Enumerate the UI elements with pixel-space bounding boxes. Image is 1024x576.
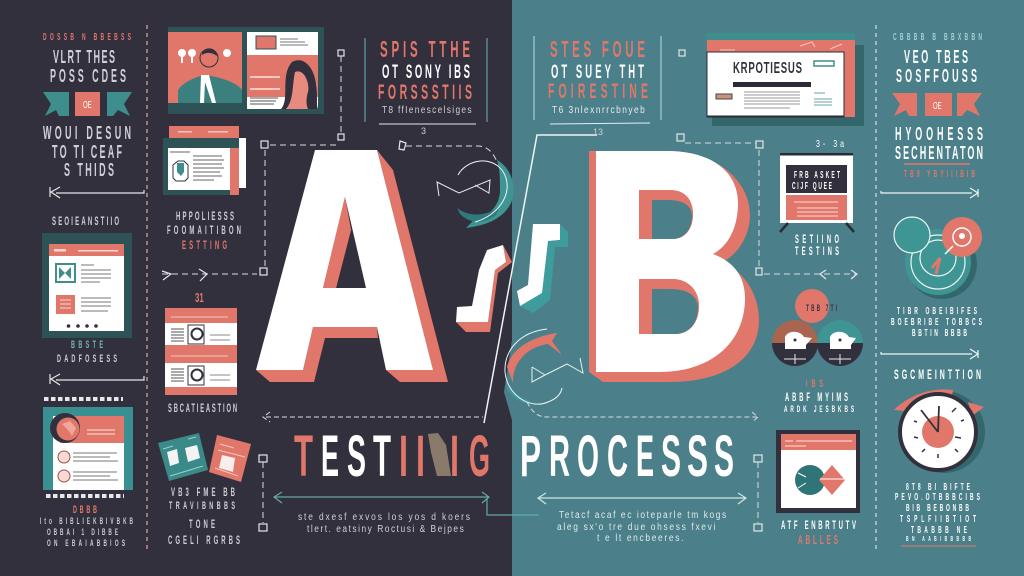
left column subheading: S THIDS	[64, 161, 114, 181]
dashed divider right	[875, 25, 877, 553]
ribbon badge left: OE	[83, 100, 92, 110]
text: baste process: DADFOSESS	[57, 352, 117, 365]
background: left dark half	[0, 0, 512, 576]
arrow right 2	[881, 349, 978, 359]
text: ab myths: ARDK JESBKBS	[784, 403, 854, 415]
heading block A	[365, 37, 487, 136]
panel: browser window	[163, 126, 246, 195]
icon group: two face circles: TBB 7TI	[806, 302, 837, 314]
title: testing: E	[321, 424, 339, 489]
panel: users illustration	[168, 27, 324, 114]
big letter B	[589, 151, 759, 382]
text block bottom right: PEVO.OTBBBCIBS	[895, 491, 980, 503]
label: segmentation right: SGCMEINTTION	[894, 368, 981, 383]
text: hypothesis formation	[167, 210, 241, 253]
ribbon badge right	[892, 93, 982, 116]
text block bottom left	[40, 503, 133, 549]
heading block A: OT SONY IBS	[382, 62, 470, 83]
dashed connector bracket upper left	[162, 50, 344, 281]
swirl icon bottom	[505, 329, 583, 404]
title: testing	[294, 424, 490, 489]
divider slash line	[484, 135, 597, 423]
title: process: E	[636, 424, 654, 489]
arrow: dashed span right	[527, 402, 758, 422]
text block bottom left: DBBB	[73, 503, 97, 516]
left column subheading: WOUI DESUN	[43, 124, 131, 144]
caption right: t e lt encbeeres.	[597, 532, 683, 544]
title: process: R	[549, 424, 570, 489]
right column subheading: SECHENTATON	[895, 144, 983, 164]
text: hypothesis formation: ESTTING	[182, 239, 227, 253]
heading block B: 13	[593, 127, 603, 137]
text block bottom right: BN AABIBBBBB	[906, 536, 971, 544]
big letter A	[256, 150, 448, 382]
text block bottom right: BIB BEBONBB	[906, 502, 969, 514]
panel: landing page card	[42, 233, 132, 338]
arrow right 1	[881, 188, 978, 198]
text block bottom right: TSPLFIIBTIOT	[900, 513, 976, 525]
text: chart caption: ABLLES	[798, 534, 838, 548]
text: cards caption: TONE	[189, 518, 215, 532]
panel: circle page card	[43, 399, 133, 496]
text: ab myths	[784, 377, 854, 415]
heading block A: FORSSSTIIS	[378, 80, 472, 104]
heading block B	[534, 36, 661, 137]
dashed connector bracket lower right	[754, 455, 762, 531]
arrow: teal span right	[538, 493, 746, 504]
text: cards caption	[168, 486, 240, 548]
text: hypothesis formation: HPPOLIESSS	[176, 210, 234, 224]
text: baste process: BBSTE	[71, 338, 103, 351]
right column heading	[893, 31, 982, 87]
title: testing: I	[450, 424, 459, 489]
arrow left 2	[50, 374, 144, 385]
caption right	[557, 509, 726, 544]
panel: tv testing screen: 3- 3a	[816, 138, 844, 149]
text: setting testing: TESTINS	[795, 245, 839, 258]
right column heading: CBBBB B BBXBBN	[893, 31, 982, 43]
ribbon badge right: OE	[933, 101, 942, 111]
right column subheading: HYOOHESSS	[895, 125, 983, 145]
title: process: S	[661, 424, 681, 489]
dashed connector bracket right	[677, 50, 857, 279]
text: cards caption: CGELI RGRBS	[168, 534, 240, 548]
dashed connector bracket lower left	[259, 455, 267, 531]
coral glyph: 31	[195, 291, 204, 306]
text: cards caption: TRAVIBNBBS	[169, 499, 235, 512]
slash squiggle right half	[517, 224, 568, 313]
left column subheading: TO TI CEAF	[52, 143, 122, 163]
left column heading: POSS CDES	[50, 67, 126, 87]
left column subheading	[43, 124, 131, 181]
caption left	[298, 511, 470, 535]
title: testing: T	[294, 424, 313, 489]
text: chart caption: ATF ENBRTUTV	[781, 519, 856, 533]
panel: chart window	[776, 430, 860, 513]
title: testing: I	[416, 424, 425, 489]
right column heading: SOSFFOUSS	[896, 67, 977, 87]
text block bottom right: TBABBB NE	[911, 524, 967, 536]
left column heading: VLRT THES	[53, 48, 115, 68]
title: process: S	[714, 424, 734, 489]
slash squiggle left half	[456, 245, 512, 332]
ribbon badge left	[43, 92, 132, 116]
panel: hypothesis browser: KRPOTIESUS	[733, 58, 802, 77]
panel: tv testing screen: CIJF QUEE	[792, 180, 832, 192]
icon: stopwatch	[894, 390, 985, 473]
title: testing: S	[347, 424, 366, 489]
title: process	[520, 424, 734, 489]
left column heading	[43, 31, 131, 87]
right column subheading	[895, 125, 983, 180]
title: process: P	[520, 424, 541, 489]
left column heading: DOSSB N BBEBSS	[43, 31, 131, 43]
text block right middle: TIBR OBEIBIFES	[897, 305, 977, 317]
heading block B: OT SUEY THT	[551, 62, 645, 83]
caption left: ste dxesf exvos los yos d koers	[298, 511, 470, 523]
cards: tilted pair	[158, 433, 251, 482]
infographic canvas: G	[469, 424, 490, 489]
background: right teal half	[504, 0, 1024, 576]
text: setting testing: SETIINO	[795, 233, 839, 246]
heading block B: FOIRESTINE	[548, 79, 648, 103]
panel: segmentation card	[165, 308, 237, 395]
arrow: dashed span left	[263, 412, 483, 422]
dashed divider left	[146, 25, 148, 553]
heading block A: 3	[421, 126, 426, 136]
label: segmentation: SBCATIEASTION	[168, 402, 237, 415]
caption left: tlert. eatsiny Roctusi & Bejpes	[307, 523, 464, 535]
text: chart caption	[781, 519, 856, 548]
title: testing: I	[399, 424, 408, 489]
arrow left 1	[50, 187, 144, 198]
caption right: Tetacf acaf ec ioteparle tm kogs	[559, 509, 726, 521]
swirl icon top	[399, 141, 514, 228]
panel: hypothesis browser	[707, 33, 864, 126]
right column subheading: TB9 YBYIIIBIB	[904, 168, 975, 180]
title: process: C	[607, 424, 628, 489]
panel: tv testing screen	[780, 138, 854, 232]
text: ab myths: IBS	[806, 377, 823, 390]
text block right middle	[891, 305, 982, 339]
text: setting testing	[795, 233, 839, 258]
text: hypothesis formation: FOOMAITIBON	[167, 224, 241, 238]
heading block B: T6 3nlexnrrcbnyeb	[552, 104, 645, 116]
text block bottom left: ON EBAIABBIOS	[47, 537, 125, 549]
text: cards caption: VB3 FME BB	[171, 486, 235, 500]
panel: tv testing screen: FRB ASKET	[794, 169, 840, 181]
title: process: O	[577, 424, 599, 489]
title: testing: T	[373, 424, 391, 489]
text block right middle: BBTIN BBBB	[912, 327, 967, 339]
heading block A: SPIS TTHE	[380, 37, 470, 62]
arrow: teal span left	[274, 492, 539, 515]
heading block A: T8 ffIenescelsiges	[382, 104, 472, 116]
right column heading: VEO TBES	[904, 48, 968, 68]
icon: segmentation circles	[894, 217, 982, 299]
caption right: aleg sx'o tre due ohsess fxevi	[557, 521, 715, 533]
text block bottom right	[895, 481, 980, 546]
icon group: two face circles	[772, 289, 863, 366]
heading block B: STES FOUE	[550, 37, 645, 62]
title: process: S	[687, 424, 708, 489]
text block right middle: BOEBRIBE TOBBCS	[891, 316, 982, 328]
text block bottom right: 8T8 BI BIFTE	[906, 481, 970, 493]
text: ab myths: ABBF MYIMS	[785, 391, 848, 404]
text: baste process	[57, 338, 117, 365]
text block bottom left: OBBAI 1 DIBBE	[47, 526, 118, 538]
text block bottom left: Ito BIBLIEKBIVBKB	[40, 515, 133, 527]
label: segmentation left: SEOIEANSTIIO	[52, 215, 119, 229]
